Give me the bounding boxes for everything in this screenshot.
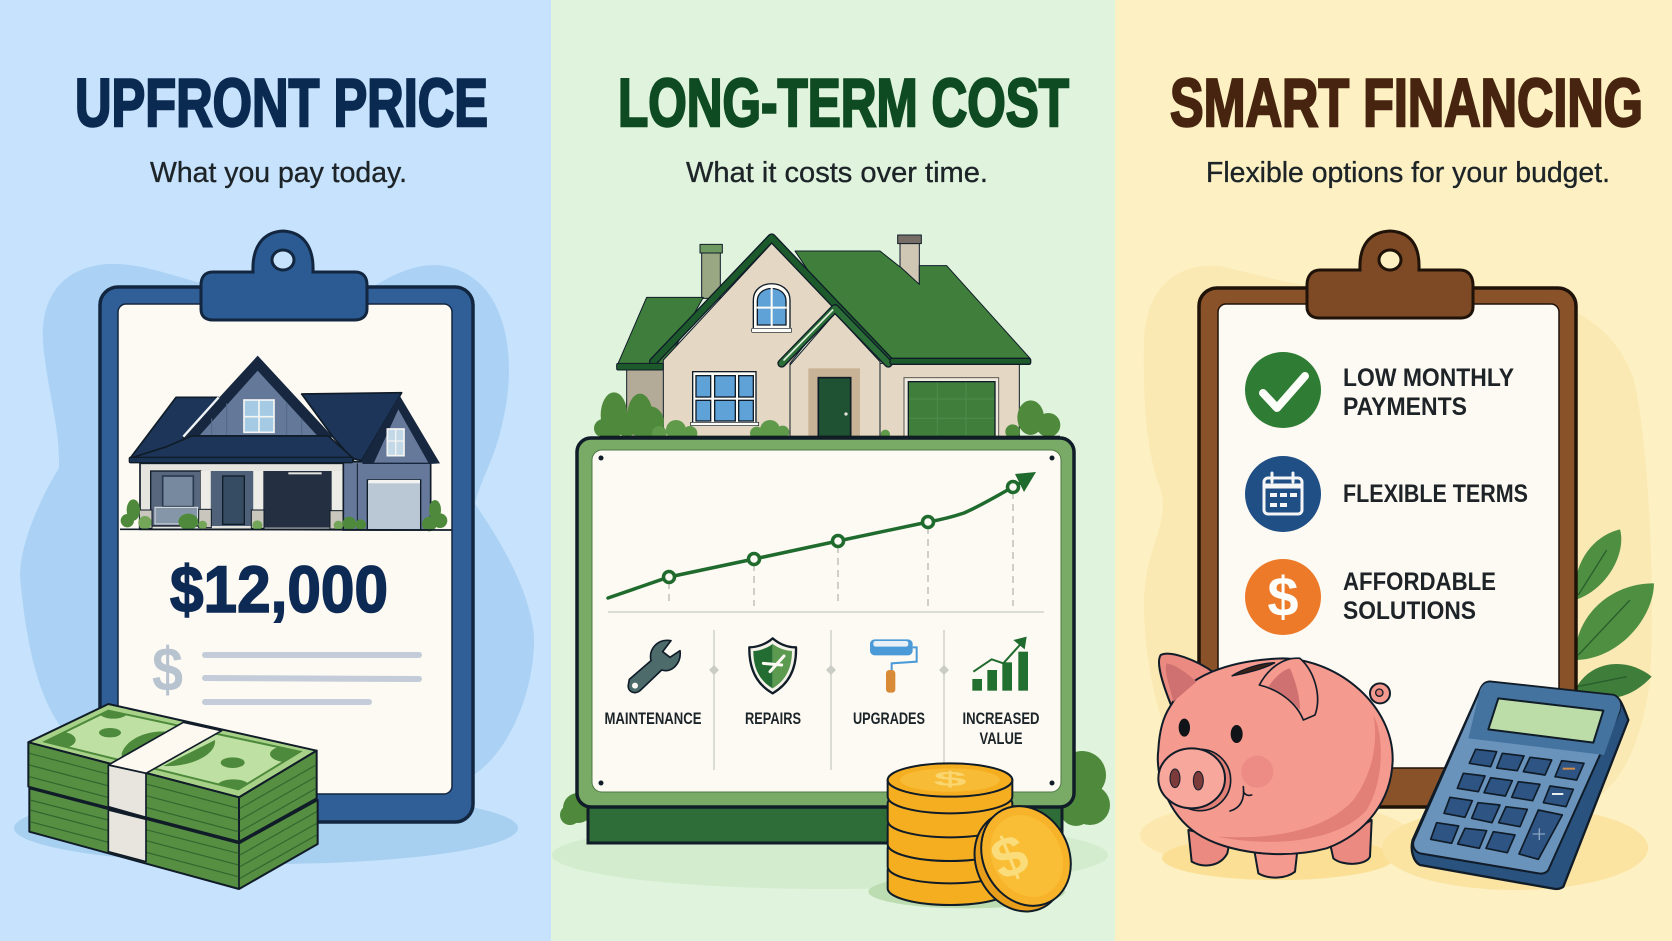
panel: upfront price bbox=[14, 77, 534, 890]
item: affordable solutions: SOLUTIONS bbox=[1343, 597, 1476, 625]
clipboard bbox=[1199, 231, 1576, 807]
heading: LONG-TERM COST bbox=[618, 65, 1069, 141]
icon labels: MAINTENANCE bbox=[604, 709, 702, 728]
icon: paint roller bbox=[870, 639, 917, 693]
dollar sign: $ bbox=[152, 636, 183, 705]
item: flexible terms bbox=[1245, 456, 1528, 532]
panel: smart financing bbox=[1115, 0, 1672, 941]
icon: shield bbox=[749, 638, 796, 693]
icon: dollar: $ bbox=[1267, 565, 1299, 628]
item: affordable solutions bbox=[1245, 559, 1496, 635]
piggy bank bbox=[1158, 654, 1393, 878]
gold coins: $ bbox=[982, 822, 1037, 893]
price: $12,000 bbox=[170, 552, 388, 626]
garage door bbox=[904, 378, 999, 437]
front window bbox=[691, 372, 759, 426]
floor shadow bbox=[14, 792, 518, 864]
door bbox=[808, 368, 860, 437]
floor shadows bbox=[1140, 801, 1648, 890]
background blob bbox=[20, 264, 534, 774]
subheading: Flexible options for your budget. bbox=[1206, 157, 1610, 189]
heading: UPFRONT PRICE bbox=[75, 65, 488, 141]
item: affordable solutions: AFFORDABLE bbox=[1343, 568, 1496, 596]
rising cost line chart bbox=[608, 472, 1044, 612]
attic window bbox=[752, 284, 792, 332]
icon labels: INCREASED bbox=[962, 709, 1040, 728]
icon: check bbox=[1245, 352, 1321, 428]
text placeholder lines bbox=[205, 655, 419, 702]
gold coins: $ bbox=[933, 768, 968, 791]
house illustration bbox=[120, 356, 452, 531]
icon: calendar bbox=[1245, 456, 1321, 532]
icon: growth bars bbox=[972, 637, 1028, 691]
item: low monthly payments: PAYMENTS bbox=[1343, 393, 1467, 421]
icon labels: REPAIRS bbox=[745, 709, 801, 728]
item: flexible terms: FLEXIBLE TERMS bbox=[1343, 480, 1528, 508]
subheading: What you pay today. bbox=[150, 157, 407, 189]
icon labels: VALUE bbox=[980, 729, 1022, 748]
icons row bbox=[628, 637, 1028, 693]
house illustration bbox=[594, 235, 1060, 441]
subheading: What it costs over time. bbox=[686, 157, 988, 189]
board base bbox=[588, 805, 1062, 843]
background blob bbox=[1144, 266, 1652, 806]
board bbox=[577, 438, 1074, 807]
column dividers bbox=[709, 630, 949, 770]
side bushes bbox=[560, 751, 1110, 826]
item: low monthly payments bbox=[1245, 352, 1514, 428]
calculator bbox=[1412, 682, 1628, 889]
icon labels bbox=[604, 709, 1040, 748]
panel: long-term cost bbox=[551, 0, 1115, 941]
clipboard bbox=[100, 231, 473, 822]
floor ellipse bbox=[552, 821, 1108, 889]
leaves bbox=[1575, 529, 1654, 698]
icon: wrench bbox=[628, 640, 680, 693]
gold coins bbox=[868, 763, 1088, 927]
cash stacks bbox=[28, 704, 318, 889]
icon: dollar bbox=[1245, 559, 1321, 635]
bushes bbox=[594, 392, 1060, 441]
icon labels: UPGRADES bbox=[853, 709, 925, 728]
item: low monthly payments: LOW MONTHLY bbox=[1343, 364, 1514, 392]
